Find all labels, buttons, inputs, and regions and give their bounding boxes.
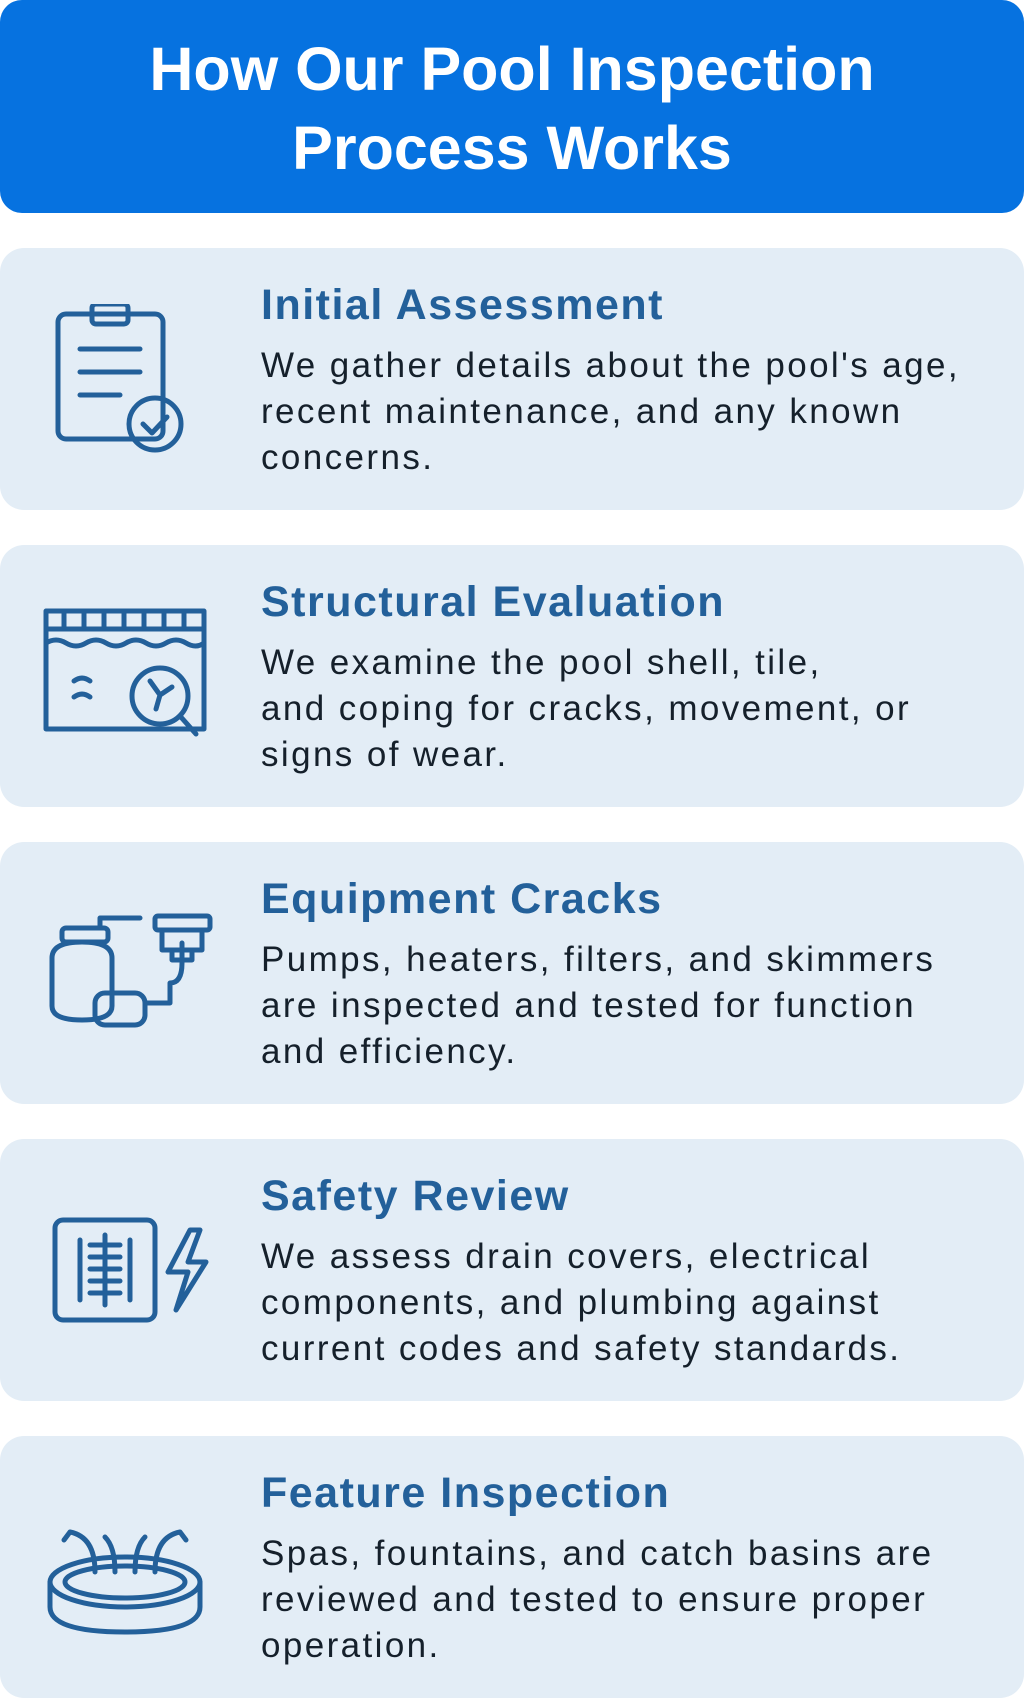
text block: are inspected and tested for function <box>261 986 916 1025</box>
heading: Initial Assessment <box>261 281 664 329</box>
icon: drain cover and lightning <box>52 1218 208 1322</box>
text block: operation. <box>261 1626 441 1665</box>
heading: Equipment Cracks <box>261 875 663 923</box>
panel: safety review <box>0 1139 1024 1401</box>
text block: Spas, fountains, and catch basins are <box>261 1534 934 1573</box>
heading: Safety Review <box>261 1172 570 1220</box>
text block <box>261 1534 934 1665</box>
icon: pool with magnifier <box>44 608 206 736</box>
text block: We examine the pool shell, tile, <box>261 643 822 682</box>
text block: signs of wear. <box>261 735 509 774</box>
text block: We gather details about the pool's age, <box>261 346 960 385</box>
title: Process Works <box>292 114 732 182</box>
text block: recent maintenance, and any known <box>261 392 903 431</box>
heading: Structural Evaluation <box>261 578 725 626</box>
title: How Our Pool Inspection <box>149 35 875 103</box>
text block <box>261 643 911 774</box>
panel: initial assessment <box>0 248 1024 510</box>
text block <box>261 940 935 1071</box>
panel: equipment cracks <box>0 842 1024 1104</box>
icon: pump and filter <box>50 914 212 1028</box>
text block <box>261 346 960 477</box>
text block: and coping for cracks, movement, or <box>261 689 911 728</box>
text block: current codes and safety standards. <box>261 1329 901 1368</box>
text block: reviewed and tested to ensure proper <box>261 1580 927 1619</box>
text block: and efficiency. <box>261 1032 518 1071</box>
icon: spa fountain <box>48 1530 202 1634</box>
title <box>0 0 1024 213</box>
panel: structural evaluation <box>0 545 1024 807</box>
icon: clipboard check <box>56 304 184 452</box>
text block <box>261 1237 901 1368</box>
text block: components, and plumbing against <box>261 1283 881 1322</box>
panel: feature inspection <box>0 1436 1024 1698</box>
heading: Feature Inspection <box>261 1469 670 1517</box>
text block: Pumps, heaters, filters, and skimmers <box>261 940 935 979</box>
text block: concerns. <box>261 438 434 477</box>
text block: We assess drain covers, electrical <box>261 1237 871 1276</box>
